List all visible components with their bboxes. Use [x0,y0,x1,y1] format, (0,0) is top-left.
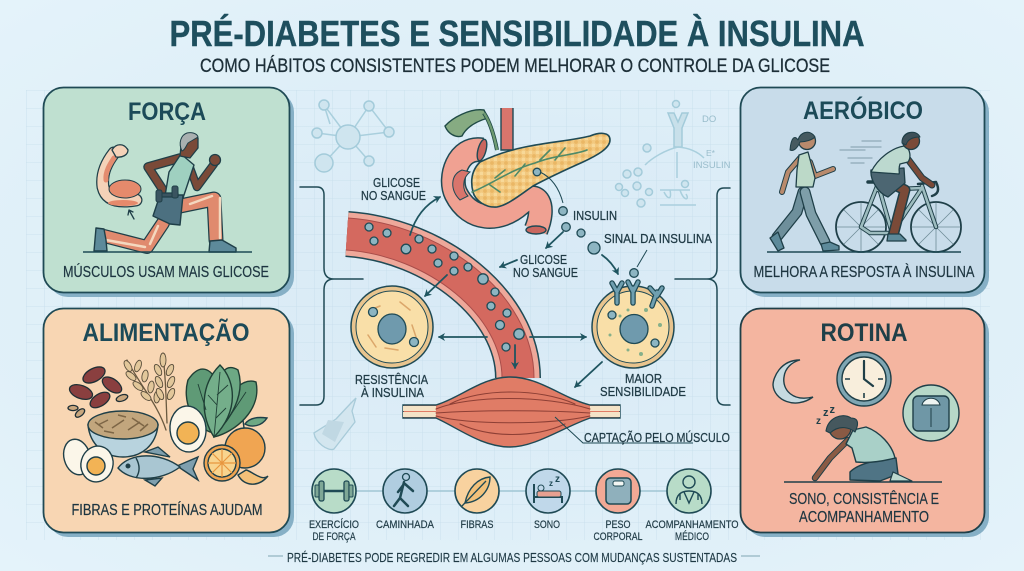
right bracket connector [675,188,730,405]
icon row labels: FIBRAS [460,519,494,531]
heading: alimentação: ALIMENTAÇÃO [82,317,250,347]
icon: doctor [667,469,711,513]
caption: alimentação: FIBRAS E PROTEÍNAS AJUDAM [72,500,262,519]
gallbladder and duct [445,110,497,150]
icon: bed: z [555,474,560,485]
icon: zz: z [830,404,836,416]
panel: força [44,88,294,297]
label: glicose no sangue middle [513,253,578,280]
panel: alimentação [44,308,294,537]
label: glicose no sangue middle: NO SANGUE [513,266,578,280]
label: maior sensibilidade [600,372,686,399]
heading: força: FORÇA [128,98,206,126]
caption: força: MÚSCULOS USAM MAIS GLICOSE [63,262,269,281]
label: insulin: INSULIN [573,209,617,223]
panel: aeróbico [740,88,989,297]
insulin molecules [533,168,638,277]
ground line [784,481,942,483]
icon: dumbbell [312,469,356,513]
icon: zz: z [823,407,828,419]
insulin receptors [612,282,662,306]
decorative receptor diagram: DO [702,114,716,125]
subtitle: COMO HÁBITOS CONSISTENTES PODEM MELHORAR O CONTROLE DA GLICOSE [200,56,830,77]
heading: rotina: ROTINA [820,319,908,347]
decorative molecule icon [312,100,394,172]
caption: aeróbico: MELHORA A RESPOSTA À INSULINA [754,262,975,281]
icon: sleeping zzz: z [816,416,821,427]
icon: body weight scale [596,469,640,513]
icon: flexed arm [103,145,141,219]
arrows [410,172,693,443]
caption: rotina: SONO, CONSISTÊNCIA E [789,489,939,508]
icon row labels: CAMINHADA [376,519,435,531]
icon: wheat [122,353,176,430]
icon: moon [773,360,813,403]
ground line [767,251,961,253]
decorative receptor diagram: INSULIN [693,160,731,171]
label: resistência: À INSULINA [361,385,425,400]
decorative receptor diagram: E* [706,148,716,158]
icon: fibre leaf [455,469,499,513]
blood vessel [347,223,524,378]
label: maior sensibilidade: MAIOR [625,372,662,386]
icon row labels: DE FORÇA [312,531,356,543]
caption: rotina: ACOMPANHAMENTO [799,509,929,526]
icon: clock [837,352,891,406]
pancreas [472,133,610,207]
upper artery [501,108,513,150]
label: resistência: RESISTÊNCIA [355,372,429,387]
icon: bed [526,469,570,513]
pancreatic duct [472,148,587,192]
icon row [312,469,711,513]
icon: spinach [186,365,257,437]
icon: eggs pair [60,436,117,486]
icon: walking [383,469,427,513]
decorative glucose bag [314,398,356,450]
panel: rotina [740,308,989,537]
icon: boiled egg large [168,405,208,453]
icon row labels: SONO [534,519,560,531]
icon row labels: ACOMPANHAMENTO [646,519,739,531]
icon: fish [118,447,198,486]
icon row labels: PESO [606,519,631,531]
label: glicose no sangue top: GLICOSE [373,176,420,190]
blood glucose dots [365,223,524,351]
icon: lunging runner [94,133,236,252]
caption: rotina [789,489,939,526]
label: glicose no sangue top: NO SANGUE [361,189,426,203]
bottom note: PRÉ-DIABETES PODE REGREDIR EM ALGUMAS PESSOAS COM MUDANÇAS SUSTENTADAS [287,550,737,565]
heading: aeróbico: AERÓBICO [803,95,923,125]
ground line [83,251,252,253]
title: PRÉ-DIABETES E SENSIBILIDADE À INSULINA [170,13,864,54]
icon: grain bowl [88,411,158,457]
icon: bed: z [549,479,553,488]
icon row labels: CORPORAL [594,531,642,543]
label: glicose no sangue middle: GLICOSE [520,253,567,267]
icon: beans [68,364,129,419]
cell: insulin resistance [351,286,433,368]
icon: cyclist on bicycle [836,132,961,252]
duodenum [453,138,546,234]
muscle [403,377,620,447]
icon: scale [903,385,959,441]
icon: kneeling person [815,416,912,481]
icon row labels [309,518,739,543]
icon: oranges [204,418,268,484]
label: captação: CAPTAÇÃO PELO MÚSCULO [584,430,730,445]
label: maior sensibilidade: SENSIBILIDADE [600,385,686,399]
cell: higher sensitivity [592,282,674,368]
label: resistência [355,372,429,400]
label: glicose no sangue top [361,176,426,203]
icon: walking woman [770,132,839,251]
decorative receptor diagram [616,100,731,207]
label: sinal da insulina: SINAL DA INSULINA [604,232,713,246]
icon row labels: MÉDICO [675,530,709,543]
icon row labels: EXERCÍCIO [309,518,359,531]
left bracket connector [300,187,363,405]
